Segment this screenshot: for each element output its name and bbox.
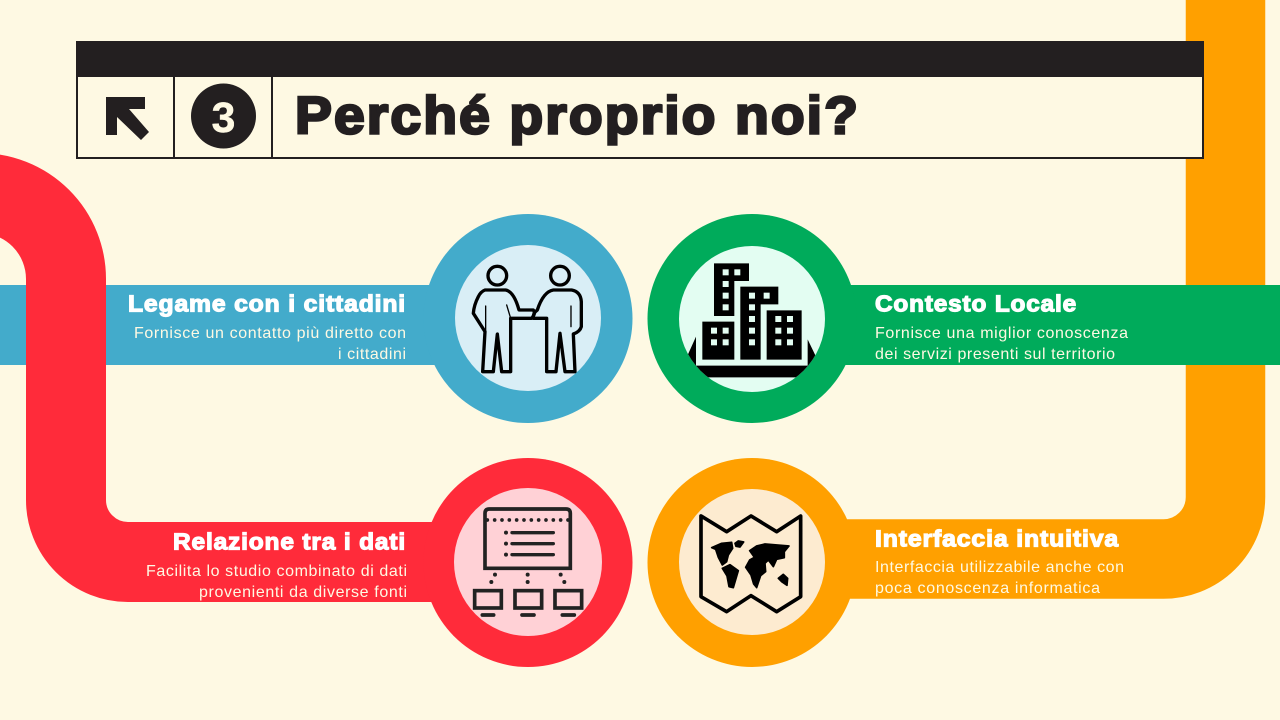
description: provenienti da diverse fonti [199, 584, 407, 601]
icon: arrow up-left [106, 97, 149, 140]
icon: handshake [473, 266, 581, 372]
blue band [0, 285, 450, 365]
description: dei servizi presenti sul territorio [875, 346, 1115, 363]
description: i cittadini [338, 346, 406, 363]
step number badge: 3 [212, 94, 235, 142]
circle badge [648, 458, 856, 667]
panel: contesto locale [648, 214, 1128, 423]
panel: relazione tra i dati [146, 458, 632, 667]
description: poca conoscenza informatica [875, 580, 1100, 597]
description [875, 559, 1124, 597]
circle badge [648, 214, 856, 423]
step number badge [191, 84, 256, 148]
heading: Interfaccia intuitiva [875, 526, 1119, 552]
icon: city buildings [682, 263, 822, 377]
heading: Relazione tra i dati [173, 528, 406, 554]
header panel [76, 41, 1204, 158]
description [134, 325, 406, 363]
description: Fornisce un contatto più diretto con [134, 325, 406, 342]
panel: legame con i cittadini [128, 214, 632, 423]
circle badge [424, 214, 632, 423]
description: Facilita lo studio combinato di dati [146, 563, 407, 580]
description [146, 563, 407, 601]
green band [830, 285, 1280, 365]
panel: interfaccia intuitiva [648, 458, 1124, 667]
orange connector path [830, 0, 1226, 559]
red connector path [0, 193, 450, 562]
description: Fornisce una miglior conoscenza [875, 325, 1128, 342]
icon: data network [475, 509, 582, 615]
description [875, 325, 1128, 363]
heading: Legame con i cittadini [128, 290, 406, 316]
icon: world map [701, 516, 801, 612]
title: Perché proprio noi? [295, 86, 860, 146]
description: Interfaccia utilizzabile anche con [875, 559, 1124, 576]
heading: Contesto Locale [875, 290, 1077, 316]
circle badge [424, 458, 632, 667]
